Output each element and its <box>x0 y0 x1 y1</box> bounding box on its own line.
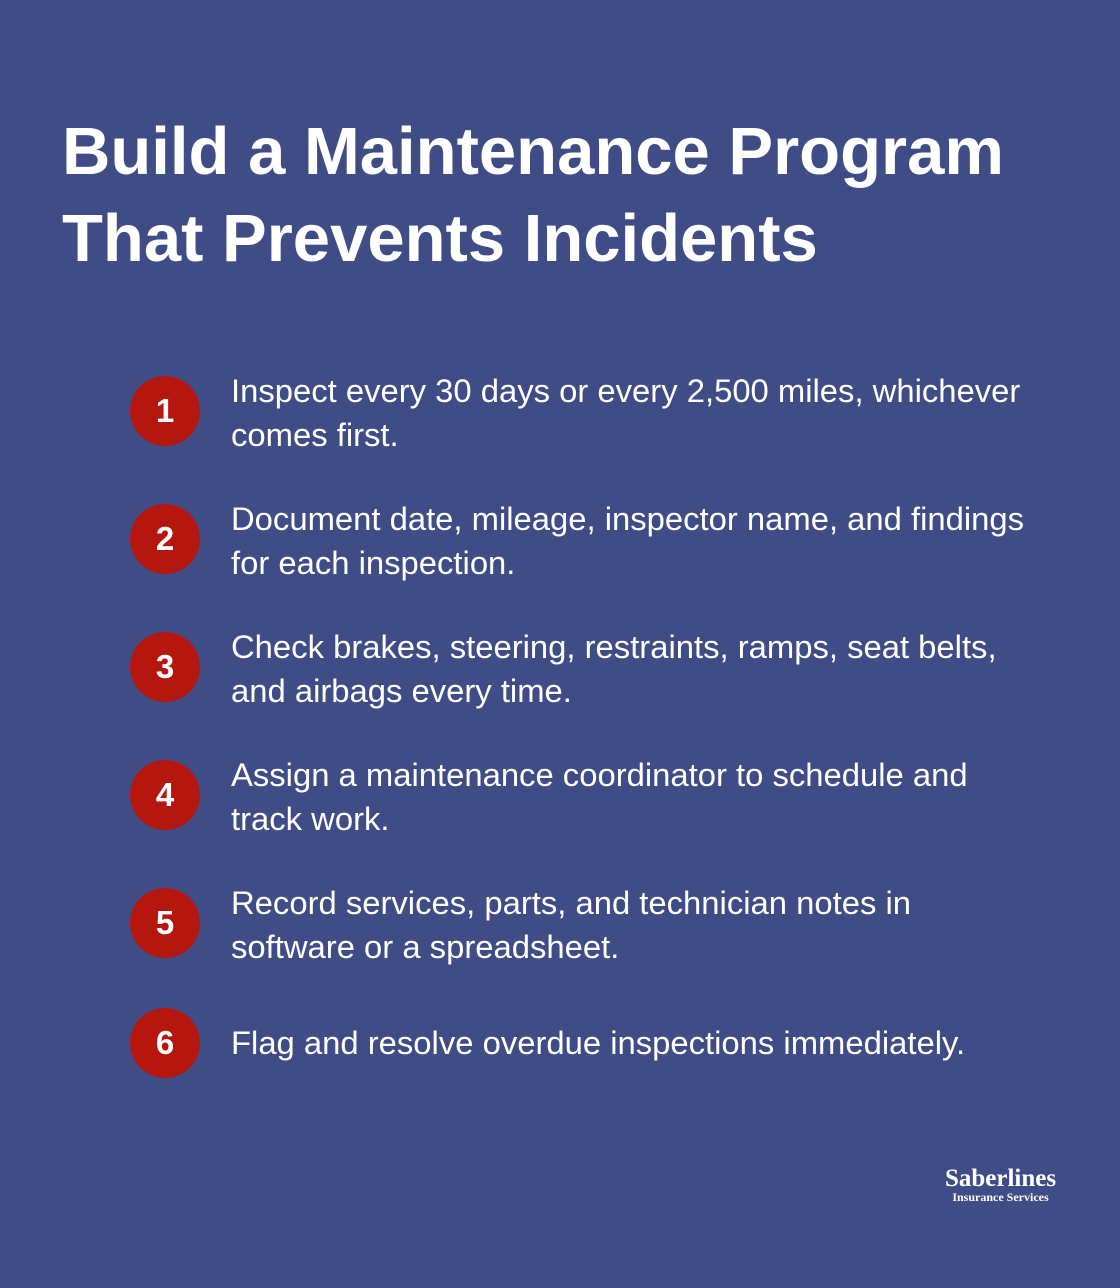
step 2 text: Document date, mileage, inspector name, and findings <box>231 500 1024 537</box>
step 4 text <box>231 756 968 837</box>
step 2 text <box>231 500 1024 581</box>
step 6 text: Flag and resolve overdue inspections immediately. <box>231 1024 965 1061</box>
step 1 text: comes first. <box>231 416 399 453</box>
badge 1 <box>130 376 200 446</box>
badge 4: 4 <box>156 776 174 813</box>
step 1 text <box>231 372 1020 453</box>
badge 4 <box>130 760 200 830</box>
step 3 text: and airbags every time. <box>231 672 572 709</box>
badge 2: 2 <box>156 520 174 557</box>
badge 6 <box>130 1008 200 1078</box>
badge 5 <box>130 888 200 958</box>
step 5 text: Record services, parts, and technician notes in <box>231 884 911 921</box>
badge 2 <box>130 504 200 574</box>
step 3 text <box>231 628 997 709</box>
title <box>62 114 1004 276</box>
logo: Saberlines <box>945 1165 1056 1192</box>
step 2 text: for each inspection. <box>231 544 515 581</box>
badge 5: 5 <box>156 904 174 941</box>
step 5 text: software or a spreadsheet. <box>231 928 619 965</box>
badge 6: 6 <box>156 1024 174 1061</box>
step 5 text <box>231 884 911 965</box>
step 3 text: Check brakes, steering, restraints, ramps, seat belts, <box>231 628 997 665</box>
step 1 text: Inspect every 30 days or every 2,500 miles, whichever <box>231 372 1020 409</box>
logo <box>945 1165 1056 1204</box>
title: That Prevents Incidents <box>62 201 818 276</box>
badge 3: 3 <box>156 648 174 685</box>
badge 3 <box>130 632 200 702</box>
logo: Insurance Services <box>952 1190 1049 1204</box>
title: Build a Maintenance Program <box>62 114 1004 189</box>
step 4 text: track work. <box>231 800 390 837</box>
badge 1: 1 <box>156 392 174 429</box>
step 4 text: Assign a maintenance coordinator to schedule and <box>231 756 968 793</box>
